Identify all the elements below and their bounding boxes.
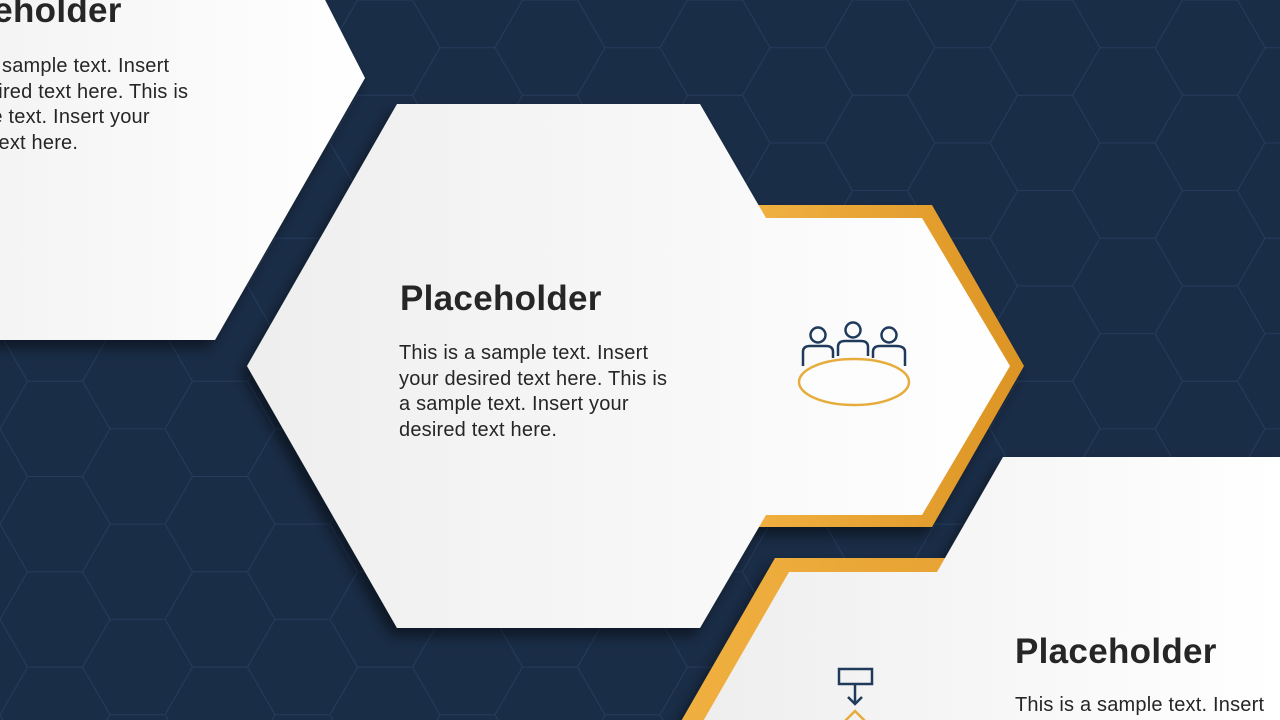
heading: middle: Placeholder <box>400 279 602 318</box>
text: middle body: This is a sample text. Insert <box>399 342 648 364</box>
panel: top-left hexagon <box>0 0 365 340</box>
text: bottom-right body: This is a sample text. Insert <box>1015 694 1264 716</box>
text: middle body: desired text here. <box>399 418 557 440</box>
panel: middle hexagon with gold arrow <box>247 104 1024 628</box>
icon: flowchart <box>839 669 872 720</box>
text: top-left body <box>0 55 188 154</box>
text: middle body <box>399 342 667 440</box>
icon: meeting table <box>799 322 909 405</box>
panel: bottom-right hexagon with gold band <box>676 457 1280 720</box>
text: middle body: a sample text. Insert your <box>399 393 629 415</box>
heading: bottom-right: Placeholder <box>1015 632 1217 671</box>
text: middle body: your desired text here. This is <box>399 368 667 390</box>
